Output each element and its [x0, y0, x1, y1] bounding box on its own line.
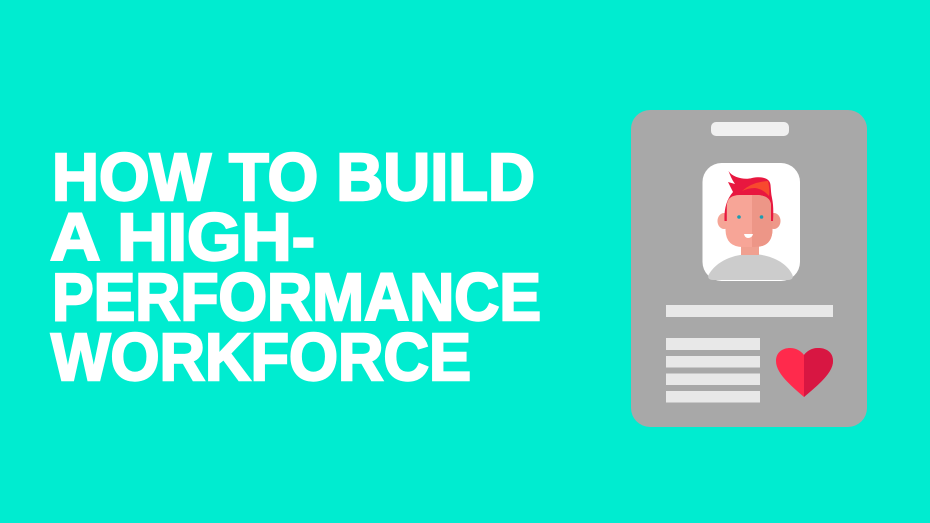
title: [50, 140, 541, 395]
icon: heart: [776, 348, 833, 397]
portrait photo: [702, 163, 800, 281]
text line: wide: [666, 305, 833, 317]
face: [726, 195, 772, 247]
hair: [724, 171, 773, 221]
icon: ID badge: [631, 110, 867, 427]
title: PERFORMANCE: [52, 260, 541, 335]
neck: [741, 240, 759, 255]
title: WORKFORCE: [51, 320, 471, 395]
lanyard slot: [711, 122, 789, 136]
eyes: [737, 215, 741, 219]
shoulders: [708, 254, 793, 280]
smile: [744, 234, 753, 238]
text lines: list: [666, 338, 760, 402]
title: A HIGH-: [50, 200, 315, 275]
ears: [718, 213, 730, 229]
hair highlight: [742, 181, 769, 196]
title: HOW TO BUILD: [52, 140, 535, 215]
badge card: [631, 110, 867, 427]
